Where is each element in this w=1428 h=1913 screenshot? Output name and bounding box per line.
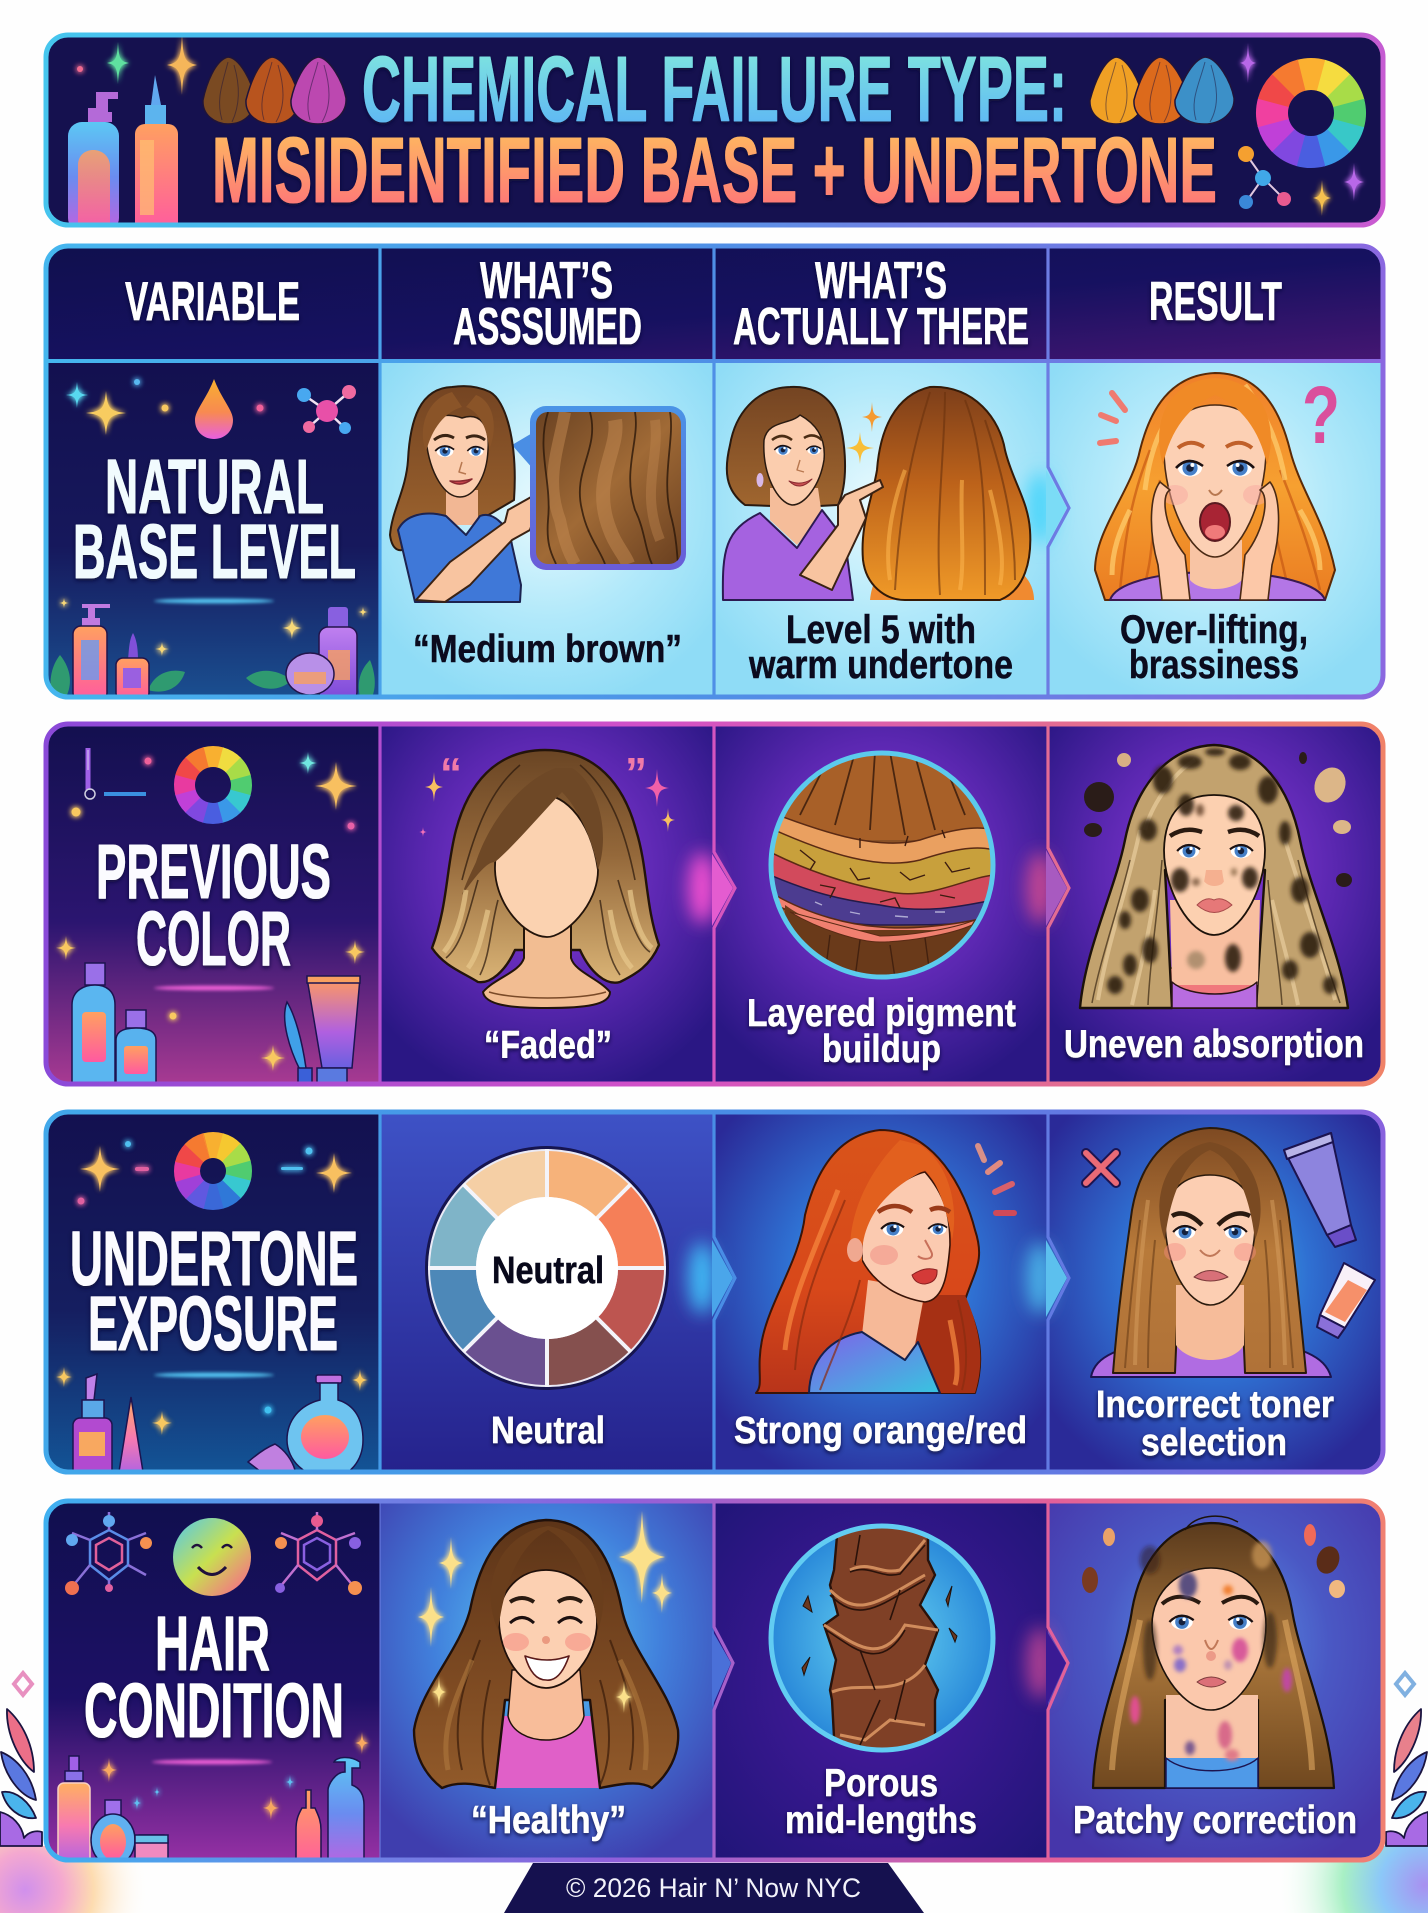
illustration: woman with uneven absorption	[1080, 745, 1352, 1008]
icon: sparkles	[101, 1732, 369, 1820]
icon: red x mark	[1086, 1153, 1116, 1183]
illustration: woman with red-orange hair	[756, 1130, 1014, 1393]
caption: level 5 with warm undertone: Level 5 with	[786, 608, 976, 652]
caption: incorrect toner selection: Incorrect toner	[1096, 1384, 1334, 1426]
frame: table top row border	[46, 246, 1383, 697]
icon: molecule left	[65, 1512, 152, 1595]
illustration: surprised woman with brassy hair	[1095, 370, 1340, 600]
frame: title border	[46, 35, 1383, 225]
icon: sparkles	[418, 1511, 672, 1713]
caption: incorrect toner selection: selection	[1141, 1422, 1287, 1464]
arrows: undertone row	[712, 1240, 1067, 1317]
label: neutral center: Neutral	[492, 1250, 604, 1292]
icons: natural base scene bottom	[50, 604, 375, 701]
column headers: RESULT	[1149, 270, 1282, 332]
caption: incorrect toner selection	[1096, 1384, 1334, 1464]
column headers	[125, 252, 1282, 356]
decorative diamond left	[14, 1673, 32, 1695]
caption: layered pigment buildup: buildup	[822, 1028, 941, 1071]
spots: floating color blobs	[1084, 752, 1352, 887]
heading: undertone exposure: UNDERTONE	[70, 1216, 358, 1302]
icon: tint brush line	[85, 748, 146, 799]
frame: undertone exposure border	[46, 1112, 1383, 1472]
spots: floating color blobs	[1082, 1524, 1345, 1598]
caption: medium brown: “Medium brown”	[413, 628, 682, 671]
illustration: layered pigment cross section	[770, 750, 994, 980]
panel: undertone exposure row	[46, 1112, 1383, 1478]
caption: uneven absorption: Uneven absorption	[1064, 1023, 1364, 1066]
icon: orange toner tube	[1317, 1263, 1375, 1338]
illustration: porous hair shaft	[770, 1525, 994, 1755]
heading: previous color: COLOR	[136, 896, 291, 982]
panel: table header and natural base level row	[46, 246, 1383, 701]
arrows: previous color row	[712, 850, 1067, 926]
caption: porous mid-lengths: mid-lengths	[785, 1799, 977, 1842]
icon: color wheel	[181, 1139, 245, 1203]
divider glow	[154, 599, 274, 603]
column headers: WHAT’S	[480, 252, 613, 310]
heading: undertone exposure: EXPOSURE	[88, 1281, 338, 1367]
arrow glows	[688, 1242, 1054, 1314]
icon: shock lines	[1100, 393, 1125, 443]
heading: hair condition: CONDITION	[84, 1668, 344, 1754]
assumed cell background	[380, 361, 714, 697]
icon: pump bottle	[68, 92, 119, 232]
column headers: ASSSUMED	[453, 298, 642, 356]
decorative leaves right	[1386, 1709, 1428, 1846]
caption: healthy: “Healthy”	[471, 1799, 626, 1842]
panel: title banner	[46, 35, 1383, 232]
swatch: hair sample	[530, 406, 686, 570]
icon: hair swatches left	[203, 57, 346, 124]
arrow glows	[688, 852, 1054, 924]
caption: strong orange/red: Strong orange/red	[734, 1410, 1027, 1452]
icon: hair swatches right	[1090, 57, 1234, 124]
illustration: faded hair mannequin	[419, 749, 675, 1008]
frame: hair condition border	[46, 1501, 1383, 1860]
variable cell background	[46, 361, 380, 697]
illustration: frowning woman with toner tubes	[1086, 1128, 1375, 1377]
icon: molecule right	[275, 1512, 362, 1595]
caption: layered pigment buildup: Layered pigment	[747, 992, 1016, 1035]
illustration: woman with patchy color	[1082, 1516, 1345, 1788]
flakes	[802, 1586, 957, 1675]
result cell background	[1048, 361, 1383, 697]
illustration: stylist pointing at warm hair	[723, 387, 1034, 600]
heading: hair condition: HAIR	[155, 1601, 270, 1687]
icon: sparkles	[846, 402, 882, 464]
spots: dark pigment patches	[1107, 748, 1337, 994]
arrow glow	[1026, 1627, 1054, 1699]
icon: purple toner tube	[1284, 1133, 1356, 1247]
spots: patchy pigment	[1130, 1541, 1292, 1761]
icon: color wheel	[178, 750, 248, 820]
icon: quote marks and sparkles: “	[440, 749, 462, 798]
icon: oil drop	[195, 379, 233, 439]
footer tab	[504, 1863, 924, 1913]
icon: question mark: ?	[1302, 370, 1340, 461]
decorative diamond right	[1396, 1673, 1414, 1695]
caption: patchy correction: Patchy correction	[1073, 1799, 1357, 1842]
caption: faded: “Faded”	[484, 1024, 612, 1067]
actual cell background	[714, 361, 1048, 697]
caption: neutral: Neutral	[491, 1410, 605, 1452]
caption: level 5 with warm undertone	[748, 608, 1013, 687]
caption: layered pigment buildup	[747, 992, 1016, 1071]
heading: natural base level	[73, 444, 356, 595]
heading: natural base level: BASE LEVEL	[73, 509, 356, 595]
icon: smiling color face	[173, 1518, 251, 1596]
divider glow	[152, 1760, 272, 1764]
icon: dropper bottle	[135, 75, 178, 232]
icon: color wheel	[1263, 65, 1359, 161]
heading: undertone exposure	[70, 1216, 358, 1367]
heading: hair condition	[84, 1601, 344, 1754]
caption: porous mid-lengths: Porous	[824, 1762, 938, 1805]
table header background	[46, 246, 1383, 361]
icons: product bottles and tube	[72, 963, 360, 1090]
divider glow	[154, 986, 274, 990]
panel: hair condition row	[46, 1501, 1383, 1870]
caption: level 5 with warm undertone: warm undertone	[748, 643, 1013, 687]
arrows: hair condition row	[712, 1630, 1066, 1707]
icon: quote marks and sparkles: ”	[625, 749, 647, 798]
caption: over-lifting brassiness: Over-lifting,	[1120, 608, 1308, 652]
icons: product bottles	[73, 1374, 363, 1478]
illustration: woman pointing at hair swatch	[390, 386, 686, 602]
caption: over-lifting brassiness: brassiness	[1129, 643, 1299, 687]
panel: previous color row	[46, 724, 1383, 1090]
icon: molecule	[1238, 146, 1291, 209]
column headers: VARIABLE	[125, 270, 300, 332]
heading: natural base level: NATURAL	[105, 444, 324, 530]
icon: quote marks and sparkles	[419, 749, 675, 837]
illustration: neutral undertone wheel	[425, 1146, 669, 1390]
heading: previous color	[96, 829, 331, 982]
icon: sparkles right	[1240, 43, 1364, 216]
icon: sparkles left	[77, 35, 197, 95]
icons: product bottles	[58, 1756, 364, 1870]
column headers: ACTUALLY THERE	[733, 298, 1029, 356]
arrow: actual to result	[1046, 470, 1067, 545]
icon: sparkle stars and dots	[66, 379, 264, 435]
caption: porous mid-lengths	[785, 1762, 977, 1842]
icon: sparkles and dots	[56, 1141, 368, 1435]
cracks	[800, 830, 970, 908]
frame: previous color border	[46, 724, 1383, 1084]
icons: table sparkle stars	[59, 598, 368, 656]
illustration: healthy smiling woman	[414, 1511, 678, 1788]
icon: alert lines	[978, 1146, 1014, 1213]
column headers: WHAT’S	[815, 252, 947, 310]
divider glow	[154, 1373, 274, 1377]
icon: molecule	[297, 385, 356, 434]
footer copyright: © 2026 Hair N’ Now NYC	[566, 1873, 861, 1903]
caption: over-lifting brassiness	[1120, 608, 1308, 687]
heading: previous color: PREVIOUS	[96, 829, 331, 915]
arrow glow	[1026, 472, 1054, 544]
decorative leaves left	[0, 1709, 42, 1846]
icon: sparkles and dots	[56, 752, 365, 1071]
